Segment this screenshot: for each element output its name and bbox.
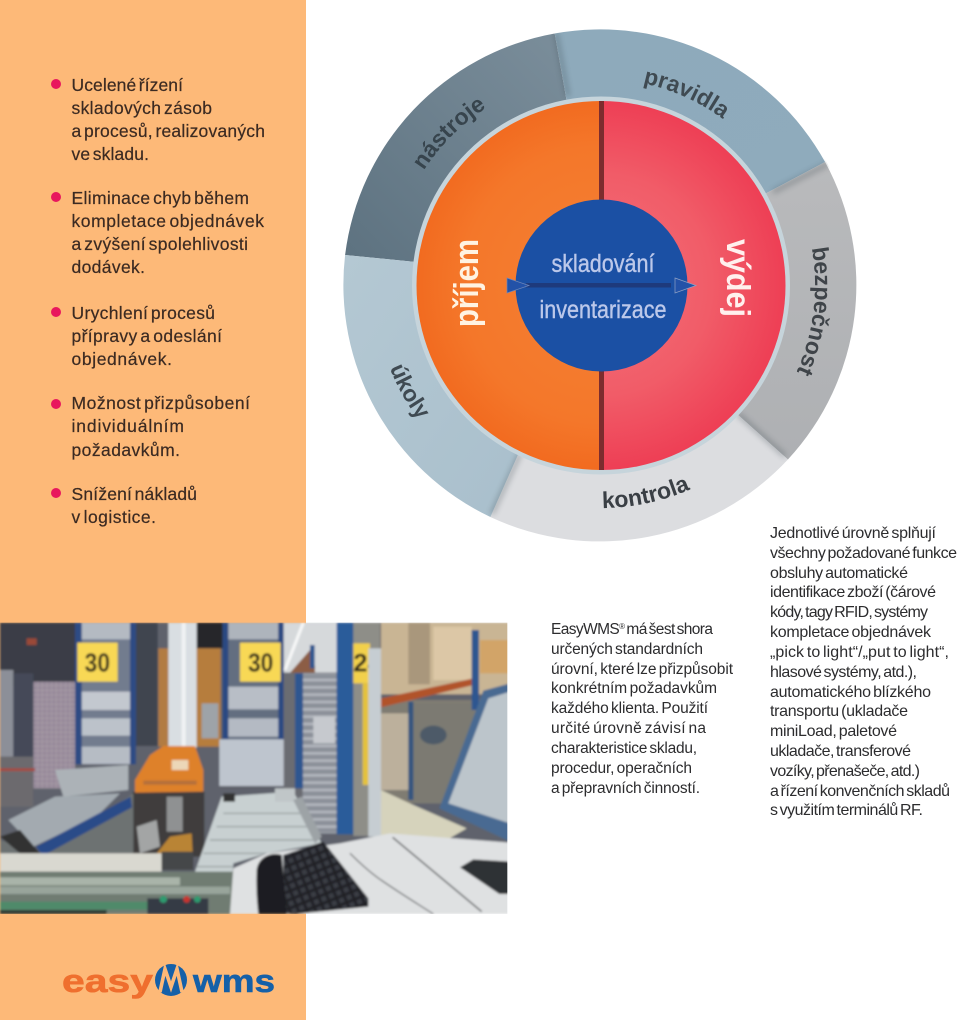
sign 30 right: [240, 643, 281, 682]
middle text block: a přepravních činností.: [551, 780, 700, 797]
control box: [147, 898, 208, 914]
first rack: [81, 639, 131, 747]
aisle top: [284, 623, 337, 673]
bullet: error elimination: dodávek.: [72, 257, 145, 277]
centre circle: [516, 200, 688, 372]
middle text block: procedur, operačních: [551, 760, 692, 777]
middle text block: [551, 621, 734, 797]
right text block: identifikace zboží (čárové: [770, 584, 936, 601]
bullet: unified management: skladových zásob: [72, 98, 212, 118]
pallet racks: [381, 623, 510, 694]
middle text block: určité úrovně závisí na: [551, 720, 706, 737]
right text block: kompletace objednávek: [770, 624, 932, 641]
inner light ring: [412, 96, 790, 474]
bullet: cost reduction: [51, 484, 197, 527]
bullet: error elimination: [51, 188, 264, 277]
bullet: cost reduction: v logistice.: [72, 507, 156, 527]
segment: nástroje: [345, 34, 567, 262]
right text block: a řízení konvenčních skladů: [770, 782, 950, 800]
half disc: příjem: [417, 101, 601, 470]
right text block: miniLoad, paletové: [770, 723, 897, 740]
orange carrier: [135, 746, 203, 793]
mouse: [460, 859, 510, 894]
easyWMS logo: easy: [62, 963, 153, 999]
right text block: automatického blízkého: [770, 684, 931, 701]
bullet: customization: [51, 393, 250, 460]
middle text block: EasyWMS: [551, 621, 620, 638]
monitor: [439, 683, 510, 842]
orange sidebar: [0, 0, 306, 1020]
half disc: výdej: [601, 101, 786, 470]
far aisle and sign 24: [353, 623, 380, 836]
bullet: unified management: a procesů, realizovaných: [72, 121, 265, 141]
middle text block: určených standardních: [551, 641, 703, 658]
machine below carrier: [133, 792, 204, 857]
label: bezpečnost: bezpečnost: [796, 247, 830, 376]
bullet: unified management: Ucelené řízení: [72, 75, 183, 95]
benefits bullet list: [51, 75, 265, 527]
right text block: obsluhy automatické: [770, 565, 908, 582]
grey bin: [219, 739, 286, 786]
vertical divider: [599, 101, 604, 470]
lifting mast: [158, 648, 168, 747]
right text block: „pick to light“/„put to light“,: [770, 644, 949, 661]
label: pravidla: pravidla: [643, 72, 727, 119]
second rack: [228, 640, 278, 739]
bullet: unified management: [51, 75, 265, 164]
left dark back wall: [0, 623, 77, 686]
foreground rails: [0, 853, 162, 872]
bullet: customization: Možnost přizpůsobení: [72, 393, 250, 413]
bullet: cost reduction: Snížení nákladů: [72, 484, 197, 504]
segment: bezpečnost: [735, 162, 856, 460]
bullet: error elimination: a zvýšení spolehlivosti: [72, 234, 248, 254]
easyWMS logo: wms: [192, 963, 275, 999]
horizontal axis with arrows: [507, 278, 696, 293]
right text block: vozíky, přenašeče, atd.): [770, 763, 920, 780]
segment: úkoly: [343, 255, 521, 517]
segment: pravidla: [555, 29, 825, 195]
right text block: hlasové systémy, atd.),: [770, 664, 917, 681]
segment: kontrola: [490, 412, 788, 541]
bullet: faster processes: Urychlení procesů: [72, 303, 215, 323]
label: úkoly: úkoly: [391, 364, 428, 417]
bullet: faster processes: [51, 303, 222, 369]
desk: [230, 833, 510, 914]
label: skladování: skladování: [552, 250, 655, 278]
label: inventarizace: inventarizace: [540, 296, 666, 324]
label: nástroje: nástroje: [414, 100, 484, 169]
label: výdej: výdej: [720, 239, 757, 317]
middle text block: charakteristice skladu,: [551, 740, 697, 757]
bullet: faster processes: přípravy a odeslání: [72, 326, 222, 346]
shelving wrap panel: [303, 673, 337, 833]
sign 30 right: 30: [248, 648, 273, 678]
right text block: [770, 525, 957, 819]
keyboard: [283, 842, 368, 914]
label: příjem: příjem: [448, 239, 486, 327]
middle text block: má šest shora: [624, 621, 713, 638]
circular diagram: [343, 29, 856, 542]
right text block: všechny požadované funkce: [770, 545, 957, 562]
right text block: ukladače, transferové: [770, 743, 911, 760]
right text block: transportu (ukladače: [770, 703, 908, 720]
middle text block: konkrétním požadavkům: [551, 680, 717, 697]
right text block: s využitím terminálů RF.: [770, 801, 923, 819]
sign 30 left: [77, 643, 118, 682]
sign 30 left: 30: [85, 648, 110, 678]
bullet: faster processes: objednávek.: [72, 349, 172, 369]
left conveyor: [0, 793, 133, 853]
logo emblem: [155, 964, 187, 996]
warehouse photo: [0, 623, 510, 914]
main conveyor: [194, 792, 322, 874]
bullet: error elimination: Eliminace chyb během: [72, 188, 249, 208]
bullet: customization: požadavkům.: [72, 440, 180, 460]
label: kontrola: kontrola: [603, 479, 690, 508]
right text block: kódy, tagy RFID, systémy: [770, 604, 928, 621]
right text block: Jednotlivé úrovně splňují: [770, 525, 937, 542]
bullet: customization: individuálním: [72, 416, 184, 436]
bullet: unified management: ve skladu.: [72, 144, 149, 164]
middle text block: úrovní, které lze přizpůsobit: [551, 661, 734, 678]
bullet: error elimination: kompletace objednávek: [72, 211, 264, 231]
easyWMS logo: [62, 963, 275, 999]
middle text block: ®: [619, 622, 625, 631]
warehouse photo: 24: [353, 650, 382, 678]
middle text block: každého klienta. Použití: [551, 700, 709, 717]
